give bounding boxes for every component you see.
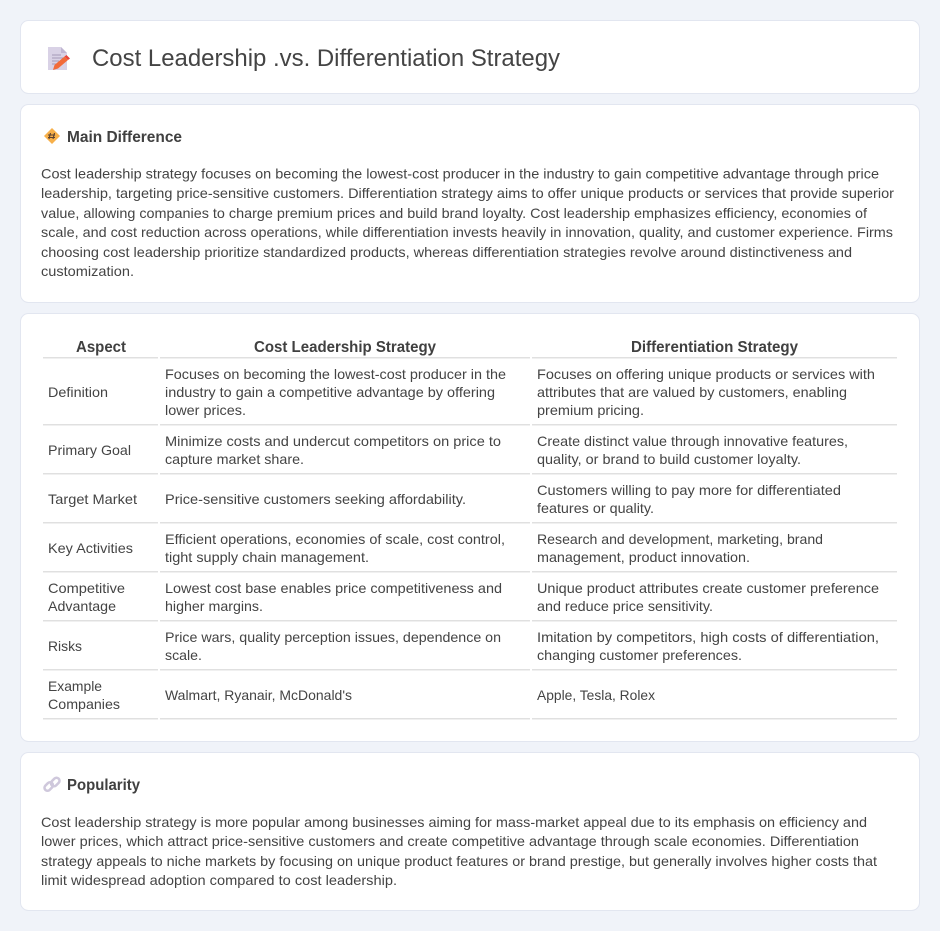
table row: definition: attributes that are valued by customers, enabling bbox=[537, 384, 847, 400]
table header row: Differentiation Strategy bbox=[631, 339, 798, 356]
table row: example companies bbox=[43, 678, 897, 720]
table row: key activities: management, product innovation. bbox=[537, 549, 750, 565]
heading: main difference: Main Difference bbox=[67, 129, 182, 146]
icon: orange diamond sign bbox=[44, 128, 60, 144]
table row: example companies: Walmart, Ryanair, McDonald's bbox=[165, 687, 352, 703]
panel: title header bbox=[20, 20, 920, 94]
text block: popularity paragraph: limit widespread adoption compared to cost leadership. bbox=[41, 872, 397, 888]
text block: popularity paragraph: strategy appeals to niche markets by focusing on unique product features or brand prestige, but generally involves higher costs that bbox=[41, 853, 877, 869]
table row: definition: lower prices. bbox=[165, 402, 246, 418]
table row: definition: Definition bbox=[48, 384, 108, 400]
table row: definition: Focuses on offering unique products or services with bbox=[537, 366, 875, 382]
table header row: Aspect bbox=[76, 339, 127, 356]
text block: popularity paragraph: Cost leadership strategy is more popular among businesses aiming for mass-market appeal due to its emphasis on efficiency and bbox=[41, 814, 867, 830]
text block: popularity paragraph: lower prices, which attract price-sensitive customers and create competitive advantage through scale economies. Differentiation bbox=[41, 833, 859, 849]
table row: definition: Focuses on becoming the lowest-cost producer in the bbox=[165, 366, 506, 382]
table row: risks: Imitation by competitors, high costs of differentiation, bbox=[537, 629, 879, 645]
table row: competitive advantage: Advantage bbox=[48, 598, 116, 614]
table row: competitive advantage: Competitive bbox=[48, 580, 125, 596]
table row: risks: scale. bbox=[165, 647, 202, 663]
table row: competitive advantage: and reduce price sensitivity. bbox=[537, 598, 713, 614]
table row: example companies: Companies bbox=[48, 696, 120, 712]
table row: key activities: Efficient operations, economies of scale, cost control, bbox=[165, 531, 505, 547]
table header row: Cost Leadership Strategy bbox=[254, 339, 436, 356]
table row: target market: features or quality. bbox=[537, 500, 654, 516]
table row: key activities: Key Activities bbox=[48, 540, 133, 556]
table row: competitive advantage: Lowest cost base enables price competitiveness and bbox=[165, 580, 502, 596]
table row: primary goal: quality, or brand to build customer loyalty. bbox=[537, 451, 801, 467]
table row: target market bbox=[43, 482, 897, 524]
table row: primary goal bbox=[43, 433, 897, 474]
table row: risks: changing customer preferences. bbox=[537, 647, 742, 663]
text block: main difference paragraph: leadership, targeting price-sensitive customers. Differentiation strategy aims to offer unique products or services that provide superior bbox=[41, 185, 894, 201]
text block: popularity paragraph bbox=[41, 814, 877, 888]
table row: key activities: tight supply chain management. bbox=[165, 549, 369, 565]
text block: main difference paragraph: value, allowing companies to charge premium prices and build brand loyalty. Cost leadership emphasizes efficiency, economies of bbox=[41, 205, 867, 221]
panel: comparison table bbox=[20, 314, 920, 742]
text block: main difference paragraph bbox=[41, 166, 894, 279]
table row: definition bbox=[43, 366, 897, 426]
table row: competitive advantage: Unique product attributes create customer preference bbox=[537, 580, 879, 596]
table row: risks: Risks bbox=[48, 638, 82, 654]
text block: main difference paragraph: choosing cost leadership prioritize standardized products, whereas differentiation strategies revolve around distinctiveness and bbox=[41, 244, 852, 260]
table row: definition: industry to gain a competitive advantage by offering bbox=[165, 384, 495, 400]
text block: main difference paragraph: customization. bbox=[41, 263, 134, 279]
title: Cost Leadership .vs. Differentiation Strategy bbox=[92, 45, 560, 72]
table row: primary goal: Create distinct value through innovative features, bbox=[537, 433, 848, 449]
table row: competitive advantage: higher margins. bbox=[165, 598, 263, 614]
icon: chain link bbox=[43, 777, 61, 792]
icon: memo with pencil bbox=[48, 47, 70, 70]
text block: main difference paragraph: Cost leadership strategy focuses on becoming the lowest-cost producer in the industry to gain competitive advantage through price bbox=[41, 166, 879, 182]
table row: key activities: Research and development, marketing, brand bbox=[537, 531, 823, 547]
table row: risks: Price wars, quality perception issues, dependence on bbox=[165, 629, 501, 645]
table row: target market: Target Market bbox=[48, 491, 137, 507]
text block: main difference paragraph: scale, and cost reduction across operations, while differentiation invests heavily in innovation, quality, and customer experience. Firms bbox=[41, 224, 893, 240]
table header row bbox=[43, 339, 897, 358]
heading: popularity: Popularity bbox=[67, 777, 140, 794]
table row: primary goal: Minimize costs and undercut competitors on price to bbox=[165, 433, 501, 449]
table row: example companies: Example bbox=[48, 678, 102, 694]
table row: primary goal: Primary Goal bbox=[48, 442, 131, 458]
table row: risks bbox=[43, 629, 897, 670]
table row: target market: Customers willing to pay more for differentiated bbox=[537, 482, 841, 498]
table row: competitive advantage bbox=[43, 580, 897, 622]
table row: primary goal: capture market share. bbox=[165, 451, 304, 467]
table row: key activities bbox=[43, 531, 897, 572]
table row: definition: premium pricing. bbox=[537, 402, 644, 418]
table row: example companies: Apple, Tesla, Rolex bbox=[537, 687, 655, 703]
panel: popularity bbox=[20, 752, 920, 910]
panel: main difference bbox=[20, 104, 920, 302]
table row: target market: Price-sensitive customers seeking affordability. bbox=[165, 491, 466, 507]
